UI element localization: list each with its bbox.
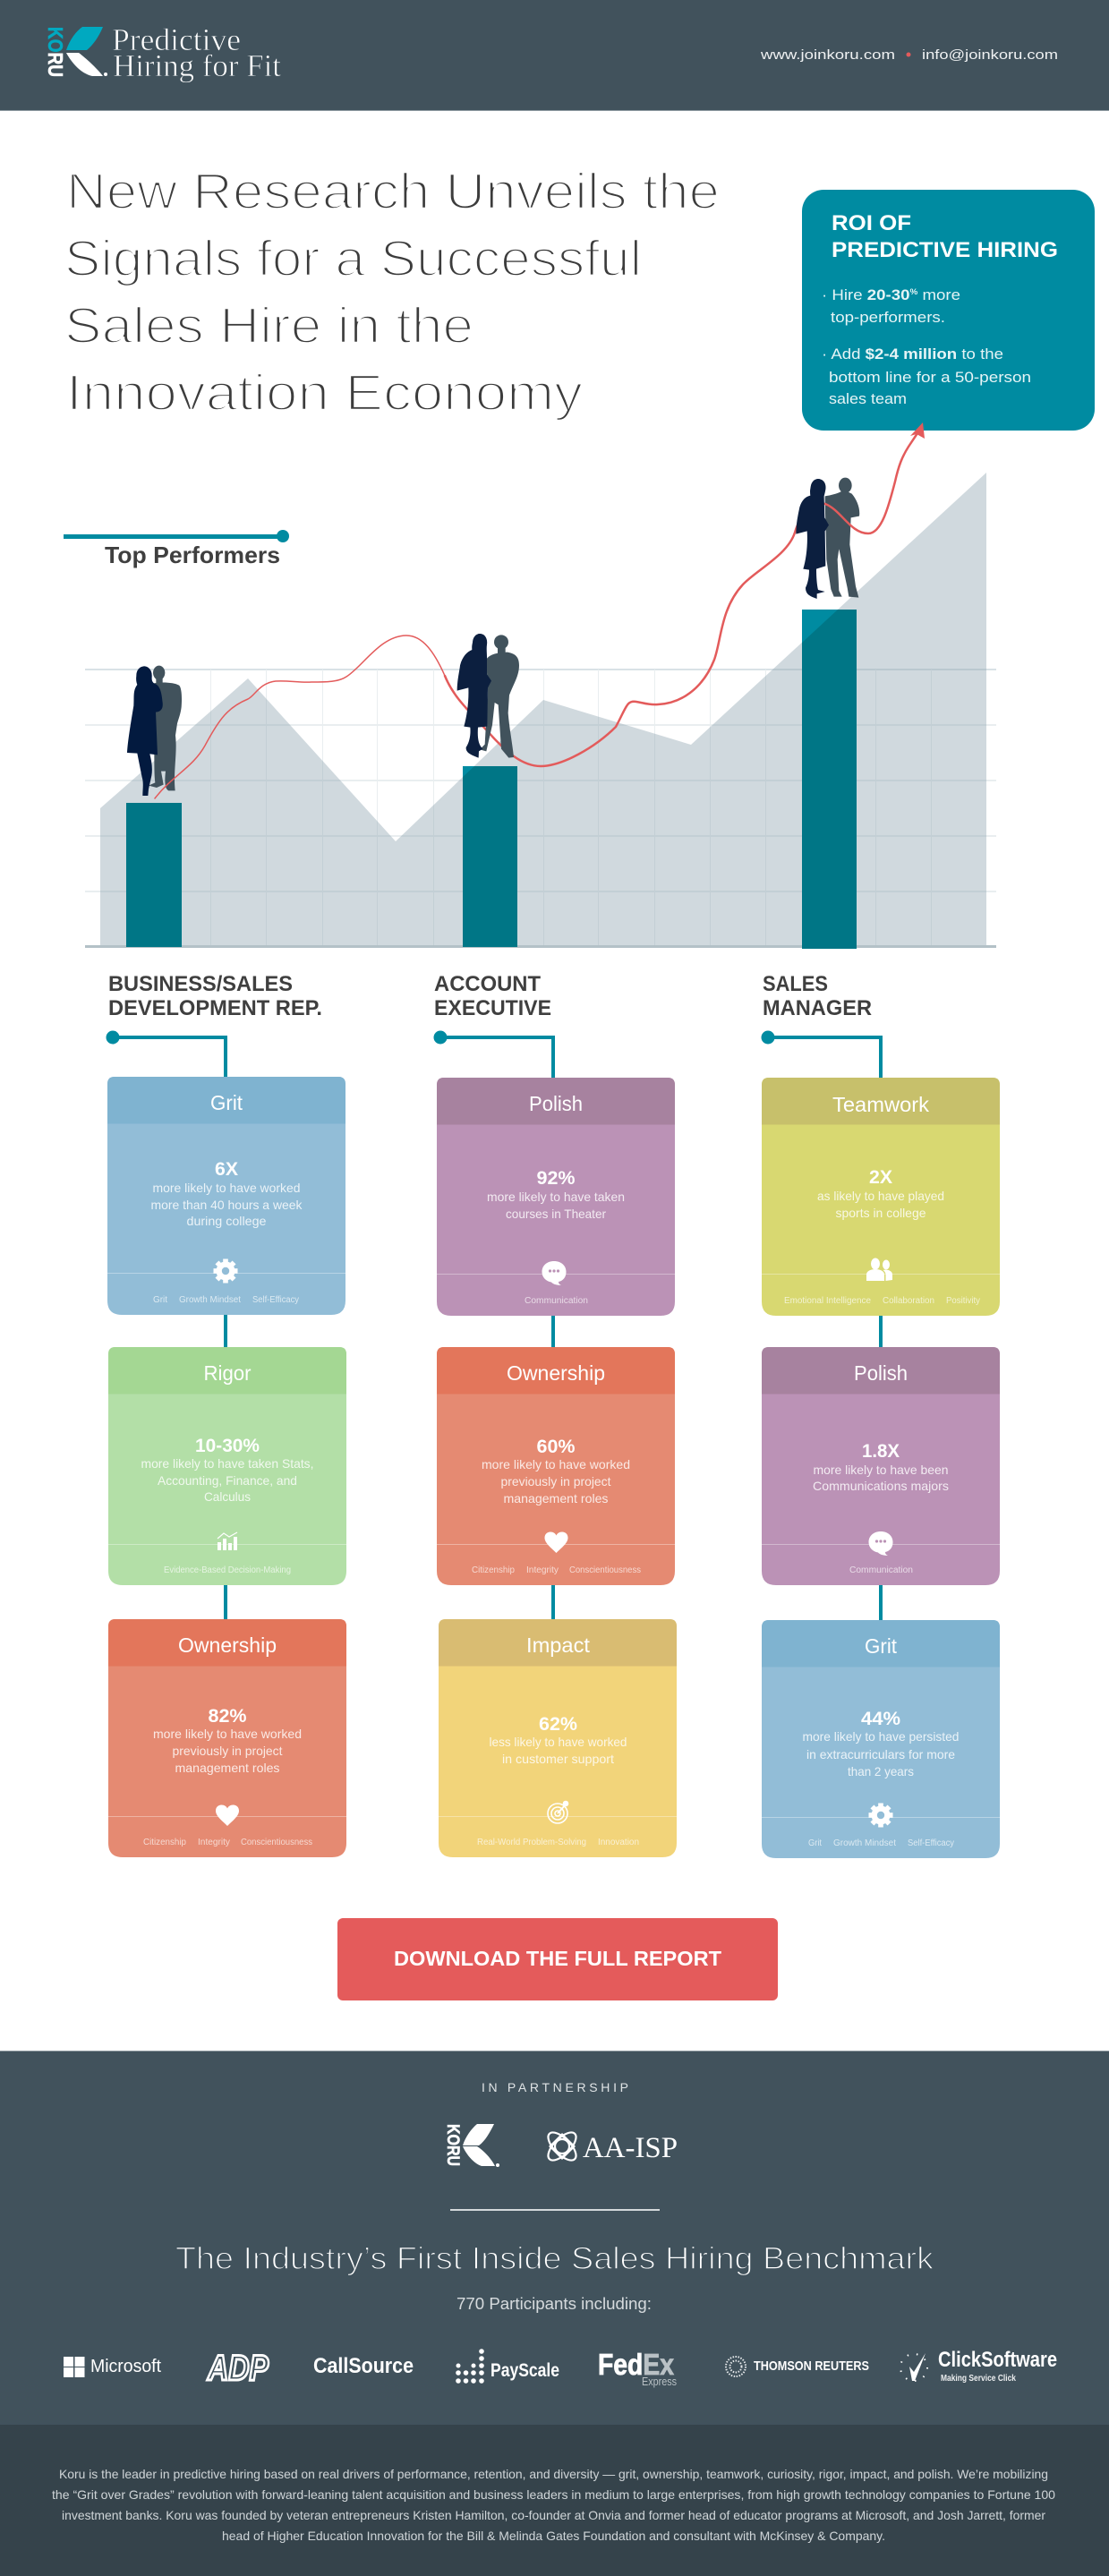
card: Ownership (sales development): Conscientiousness xyxy=(241,1838,312,1847)
logo wordmark: Hiring for Fit xyxy=(113,48,281,83)
card: Grit (sales development): Self-Efficacy xyxy=(252,1295,299,1305)
card: Ownership (sales development): previously in project xyxy=(172,1744,283,1758)
ROI bullets: more xyxy=(917,286,960,303)
footer panel: about Koru xyxy=(0,2425,1109,2576)
role headings xyxy=(108,972,872,1020)
button: download the full report xyxy=(337,1918,778,2000)
heading: ROI: ROI OF xyxy=(832,211,911,235)
logo: FedEx: FedEx xyxy=(598,2348,675,2381)
logo: ADP: ADP xyxy=(207,2349,269,2388)
card: Ownership (sales development): management roles xyxy=(175,1761,279,1775)
footer panel: about Koru: Koru is the leader in predictive hiring based on real drivers of performance, retention, and diversity — grit, ownership, teamwork, curiosity, rigor, impact, and polish. We’re mobilizing xyxy=(59,2467,1048,2481)
card: Impact: Real-World Problem-Solving xyxy=(477,1838,586,1847)
card: Grit (sales manager): more likely to have persisted xyxy=(802,1729,960,1744)
ROI bullets: top-performers. xyxy=(831,309,945,326)
footer panel: about Koru: the “Grit over Grades” revolution with forward-leaning talent acquisition and business leaders in medium to large enterprises, from high growth technology companies to Fortune 100 xyxy=(52,2487,1055,2502)
logo: CallSource: CallSource xyxy=(313,2354,414,2378)
chart: top performers xyxy=(85,431,996,949)
card: Grit (sales development): Growth Mindset xyxy=(179,1295,241,1305)
card: Polish (sales manager): Communications majors xyxy=(813,1479,949,1493)
card: Ownership (account executive): Citizenship xyxy=(472,1565,515,1575)
card: Teamwork (sales manager): Collaboration xyxy=(883,1296,934,1306)
card: Grit (sales development): more than 40 hours a week xyxy=(150,1198,303,1212)
ROI bullets: % xyxy=(910,287,917,296)
ROI bullets: · Add $2-4 million to the xyxy=(822,345,1003,363)
participants line: 770 Participants including: xyxy=(456,2295,652,2313)
role headings: EXECUTIVE xyxy=(434,996,551,1020)
card: Ownership (sales development): more likely to have worked xyxy=(153,1727,302,1741)
arrow head xyxy=(910,422,925,439)
footer panel: partnership xyxy=(0,2051,1109,2425)
card: Teamwork (sales manager): Emotional Intelligence xyxy=(784,1296,871,1306)
title: New Research Unveils the xyxy=(66,163,720,220)
card: Grit (sales manager): 44% xyxy=(861,1709,900,1729)
card: Polish (account executive) xyxy=(437,1078,675,1316)
card: Impact: less likely to have worked xyxy=(489,1735,627,1749)
logo: Microsoft: Microsoft xyxy=(90,2357,161,2376)
card: Rigor: Accounting, Finance, and xyxy=(158,1473,297,1488)
card: Ownership (account executive): Conscientiousness xyxy=(569,1565,641,1575)
card: Grit (sales manager): than 2 years xyxy=(848,1764,914,1778)
card: Grit (sales development): during college xyxy=(186,1214,267,1228)
card: Grit (sales manager): in extracurriculars for more xyxy=(806,1747,955,1761)
silhouette: man 1 xyxy=(149,666,182,790)
card: Polish (sales manager): Polish xyxy=(854,1361,908,1385)
card: Ownership (account executive): 60% xyxy=(537,1437,576,1457)
card: Ownership (sales development): Citizenship xyxy=(143,1838,186,1847)
card: Grit (sales development): more likely to have worked xyxy=(152,1181,301,1195)
icon: rising bars xyxy=(218,1532,237,1550)
card: Teamwork (sales manager): sports in college xyxy=(836,1206,926,1220)
ROI bullets: sales team xyxy=(829,390,907,407)
card: Ownership (account executive): Ownership xyxy=(507,1361,605,1385)
silhouette: man 2 xyxy=(480,635,519,758)
title: Innovation Economy xyxy=(66,364,584,422)
icon: gear xyxy=(213,1258,238,1284)
card: Ownership (account executive): more likely to have worked xyxy=(482,1457,630,1471)
card: Polish (account executive): more likely to have taken xyxy=(487,1190,625,1204)
role headings: BUSINESS/SALES xyxy=(108,972,293,996)
icon: target xyxy=(548,1801,567,1823)
card: Ownership (account executive): management roles xyxy=(503,1491,609,1506)
icon: speech bubble xyxy=(868,1531,893,1556)
silhouette: woman 1 xyxy=(127,666,163,796)
contact links: www.joinkoru.com xyxy=(760,47,895,63)
card: Teamwork (sales manager): 2X xyxy=(869,1167,892,1188)
card: Grit (sales development) xyxy=(107,1077,345,1315)
card: Rigor: more likely to have taken Stats, xyxy=(141,1456,313,1471)
icon: people xyxy=(866,1258,892,1281)
card: Grit (sales development): 6X xyxy=(215,1159,238,1180)
legend: top performers xyxy=(64,530,289,568)
card: Polish (account executive): Communication xyxy=(525,1296,588,1306)
card: Ownership (sales development) xyxy=(108,1619,346,1857)
card: Polish (account executive): Polish xyxy=(529,1092,583,1115)
card: Grit (sales manager): Grit xyxy=(808,1838,822,1848)
ROI bullets: · Hire 20-30 xyxy=(822,286,906,303)
role headings: DEVELOPMENT REP. xyxy=(108,996,322,1020)
silhouette: woman 3 xyxy=(796,479,829,599)
card: Teamwork (sales manager): Positivity xyxy=(946,1296,980,1306)
title: Signals for a Successful xyxy=(64,230,642,287)
footer panel: about Koru: investment banks. Koru was founded by veteran entrepreneurs Kristen Hamilton, co-founder at Onvia and former head of educator programs at Microsoft, and Josh Jarrett, former xyxy=(62,2508,1045,2522)
bar: account executive xyxy=(463,766,517,947)
logo: ClickSoftware: ClickSoftware xyxy=(938,2348,1057,2372)
contact links: info@joinkoru.com xyxy=(922,47,1058,63)
contact links xyxy=(760,47,1058,63)
panel: ROI of predictive hiring xyxy=(802,190,1095,431)
card: Grit (sales manager): Growth Mindset xyxy=(833,1838,896,1848)
footer panel: about Koru: head of Higher Education Innovation for the Bill & Melinda Gates Foundation and consultant with McKinsey & Company. xyxy=(222,2529,885,2543)
button: download the full report: DOWNLOAD THE FULL REPORT xyxy=(394,1947,721,1970)
header bar xyxy=(0,0,1109,111)
card: Impact: in customer support xyxy=(502,1752,614,1766)
heading: ROI xyxy=(832,211,1058,262)
logo wordmark: Predictive xyxy=(112,22,241,57)
icon: speech bubble xyxy=(542,1261,566,1285)
card: Grit (sales manager): Grit xyxy=(865,1634,898,1658)
title xyxy=(64,163,720,422)
card: Impact: Innovation xyxy=(598,1838,639,1847)
logo: KORU white xyxy=(443,2124,499,2167)
card: Rigor: Rigor xyxy=(204,1361,252,1385)
icon: heart xyxy=(216,1804,239,1826)
in partnership label: IN PARTNERSHIP xyxy=(482,2080,628,2094)
card: Teamwork (sales manager) xyxy=(762,1078,1000,1316)
area series xyxy=(100,473,986,947)
card: Impact: Impact xyxy=(526,1633,591,1657)
logo: PayScale xyxy=(456,2349,559,2384)
bar: business/sales development rep xyxy=(126,803,182,947)
logo: Microsoft xyxy=(64,2357,161,2377)
bar: sales manager xyxy=(802,610,857,949)
card: Ownership (account executive): Integrity xyxy=(526,1565,559,1575)
card: Polish (account executive): 92% xyxy=(537,1168,576,1189)
card: Rigor xyxy=(108,1347,346,1585)
card: Polish (sales manager): Communication xyxy=(849,1565,913,1575)
ROI bullets xyxy=(822,286,1031,407)
card: Rigor: Evidence-Based Decision-Making xyxy=(164,1565,291,1575)
card: Polish (sales manager) xyxy=(762,1347,1000,1585)
silhouette: man 3 xyxy=(825,478,859,598)
card: Ownership (sales development): 82% xyxy=(208,1706,247,1727)
logo wordmark xyxy=(112,22,281,83)
card: Grit (sales manager): Self-Efficacy xyxy=(908,1838,954,1848)
logo: FedEx: Express xyxy=(642,2375,677,2388)
card: Ownership (sales development): Ownership xyxy=(178,1633,277,1657)
logo: KORU xyxy=(44,27,107,77)
card: Polish (sales manager): 1.8X xyxy=(862,1441,900,1462)
icon: heart xyxy=(544,1532,567,1553)
icon: gear xyxy=(868,1803,893,1828)
logo: ClickSoftware xyxy=(900,2348,1057,2384)
logo: AA-ISP: AA-ISP xyxy=(583,2132,678,2164)
card: Impact xyxy=(439,1619,677,1857)
card: Polish (sales manager): more likely to have been xyxy=(813,1463,949,1477)
card: Teamwork (sales manager): Teamwork xyxy=(832,1093,930,1116)
card: Ownership (account executive): previously in project xyxy=(501,1474,611,1488)
axis baseline xyxy=(85,945,996,948)
card: Grit (sales development): Grit xyxy=(210,1091,243,1114)
ROI bullets: bottom line for a 50-person xyxy=(829,369,1031,386)
card: Teamwork (sales manager): as likely to have played xyxy=(817,1189,944,1203)
card: Polish (account executive): courses in Theater xyxy=(506,1207,606,1221)
logo: KORU: KORU xyxy=(44,27,67,77)
logo: AA-ISP xyxy=(543,2128,678,2165)
title: Sales Hire in the xyxy=(64,297,473,354)
role headings: ACCOUNT xyxy=(434,972,541,996)
card: Grit (sales manager) xyxy=(762,1620,1000,1858)
logo: Thomson Reuters xyxy=(726,2357,869,2376)
role headings: SALES xyxy=(763,972,828,996)
card: Rigor: 10-30% xyxy=(195,1436,260,1456)
logo: Thomson Reuters: THOMSON REUTERS xyxy=(754,2358,869,2374)
legend: top performers: Top Performers xyxy=(105,542,280,568)
red growth curve xyxy=(155,431,919,798)
silhouette: woman 2 xyxy=(457,634,491,758)
heading: ROI: PREDICTIVE HIRING xyxy=(832,238,1058,262)
logo: KORU white: KORU xyxy=(443,2124,462,2166)
benchmark heading: The Industry’s First Inside Sales Hiring Benchmark xyxy=(175,2241,934,2276)
card: Ownership (sales development): Integrity xyxy=(198,1838,230,1847)
role headings: MANAGER xyxy=(763,996,872,1020)
card: Grit (sales development): Grit xyxy=(153,1295,167,1305)
card: Impact: 62% xyxy=(539,1714,577,1735)
logo: ClickSoftware: Making Service Click xyxy=(941,2374,1016,2384)
card: Rigor: Calculus xyxy=(204,1489,251,1504)
card: Ownership (account executive) xyxy=(437,1347,675,1585)
logo: PayScale: PayScale xyxy=(491,2360,559,2381)
connectors xyxy=(106,1031,883,1814)
